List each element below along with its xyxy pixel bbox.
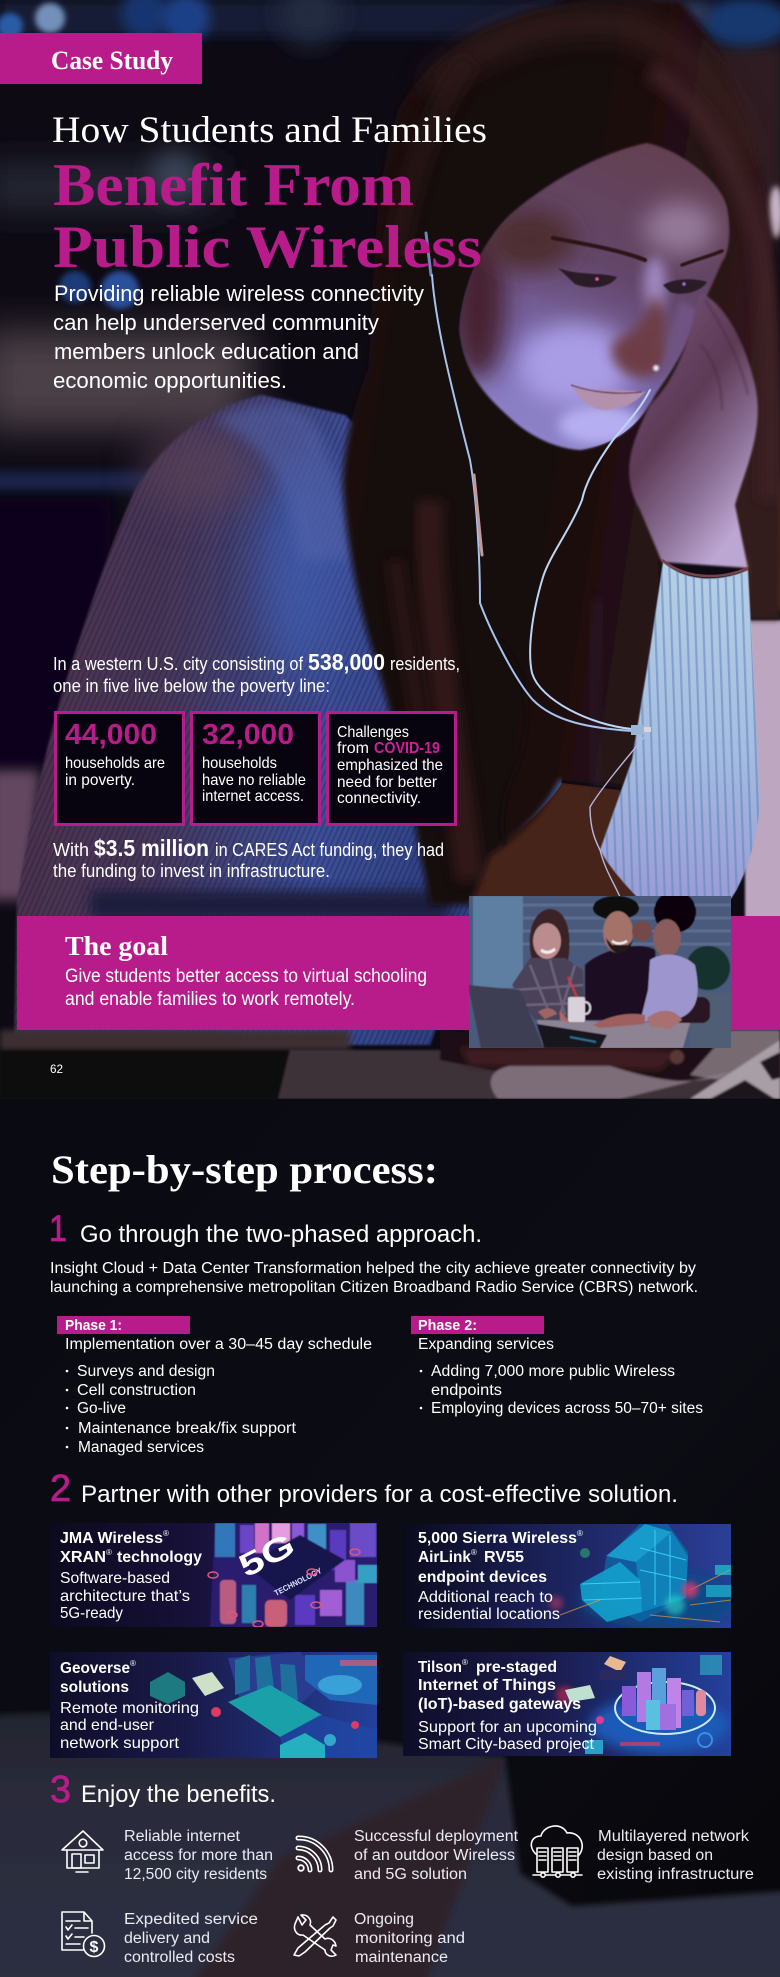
photo: earphone wires (426, 233, 651, 897)
panel: JMA Wireless (50, 1523, 377, 1627)
panel: JMA Wireless: architecture that’s (60, 1588, 190, 1605)
heading: step-by-step process: Step-by-step process: (51, 1147, 438, 1192)
panel: Sierra Wireless: ® (577, 1529, 583, 1538)
stat box: COVID-19 challenges (328, 712, 456, 824)
stat box: 32,000: have no reliable (202, 772, 306, 789)
intro text: economic opportunities. (53, 368, 287, 393)
panel: Tilson: Smart City-based project (418, 1736, 595, 1753)
step 2 heading (50, 1468, 678, 1510)
panel: Geoverse: network support (60, 1735, 180, 1752)
city statistics text: residents, (390, 654, 460, 674)
phase 2: Adding 7,000 more public Wireless (431, 1363, 675, 1380)
stat box: COVID-19 challenges: from (337, 740, 369, 757)
photo: turtleneck (500, 776, 562, 844)
funding text: $3.5 million (94, 835, 209, 861)
illustration: 5G city: 5G (233, 1527, 301, 1585)
panel: Geoverse: and end-user (60, 1717, 155, 1734)
icon: document with dollar (62, 1912, 104, 1956)
panel: JMA Wireless: ® (163, 1529, 169, 1538)
benefit: expedited delivery and costs: delivery and (124, 1930, 210, 1947)
benefit: expedited delivery and costs: Expedited service (124, 1911, 258, 1928)
panel: Sierra Wireless (403, 1524, 740, 1628)
photo: family at laptop (468, 891, 731, 1048)
page number: 62 (50, 1064, 63, 1076)
panel: JMA Wireless: XRAN (60, 1549, 106, 1566)
stat box: COVID-19 challenges: connectivity. (337, 790, 421, 807)
hero photo: woman at laptop (0, 0, 780, 1099)
panel: JMA Wireless: technology (117, 1549, 202, 1566)
photo: brown chest shadow (430, 783, 640, 900)
benefit: multilayered network design (531, 1826, 754, 1883)
phase 1: Surveys and design (77, 1363, 215, 1380)
panel: JMA Wireless: Software-based (60, 1570, 170, 1587)
phase 2: Phase 2: (418, 1318, 477, 1334)
photo: sleeve (600, 560, 760, 900)
title (52, 110, 487, 280)
icon: house (62, 1831, 103, 1872)
photo: area under goal bar (0, 1030, 780, 1099)
panel: Sierra Wireless: RV55 (484, 1549, 524, 1566)
city statistics text (53, 649, 460, 696)
benefit: expedited delivery and costs (62, 1911, 258, 1966)
illustration: digital house (549, 1524, 740, 1628)
photo: right backdrop (745, 480, 780, 920)
step 1 description (50, 1260, 698, 1296)
panel: Sierra Wireless: 5,000 Sierra Wireless (418, 1530, 577, 1547)
benefit: ongoing monitoring: Ongoing (354, 1911, 414, 1928)
photo: face (450, 143, 729, 450)
intro text: members unlock education and (54, 339, 359, 364)
background: lower section (0, 1709, 780, 1977)
funding text: in CARES Act funding, they had (215, 840, 444, 860)
icon: wifi signal (298, 1838, 331, 1871)
panel: Tilson: Tilson (418, 1659, 462, 1676)
benefit: ongoing monitoring: monitoring and (355, 1930, 465, 1947)
photo: brows and eyes (553, 238, 722, 294)
benefit: multilayered network design: existing infrastructure (597, 1866, 754, 1883)
panel: the goal: and enable families to work remotely. (65, 989, 355, 1010)
icon: cloud servers (531, 1826, 582, 1877)
panel: Tilson: Internet of Things (418, 1677, 556, 1694)
panel: Tilson: (IoT)-based gateways (418, 1696, 581, 1713)
panel: Geoverse (50, 1652, 377, 1758)
step 2 heading: 2 (50, 1468, 71, 1510)
benefit: multilayered network design: Multilayered network (598, 1828, 749, 1845)
tag: case study (0, 33, 202, 84)
photo: finger lines (700, 300, 748, 410)
photo: hair (343, 0, 780, 905)
panel: JMA Wireless: 5G-ready (60, 1605, 123, 1622)
step 3 heading: Enjoy the benefits. (81, 1781, 276, 1808)
benefit: outdoor wireless and 5G: and 5G solution (354, 1866, 467, 1883)
phase 1: Go-live (77, 1400, 126, 1417)
icon: wrench and screwdriver (294, 1915, 336, 1956)
stat box: 44,000: households are (65, 755, 165, 772)
panel: Sierra Wireless: residential locations (418, 1606, 560, 1623)
benefit: reliable internet access: Reliable internet (124, 1828, 241, 1845)
stat box: COVID-19 challenges: COVID-19 (374, 740, 440, 757)
phase 1: Maintenance break/fix support (78, 1420, 297, 1437)
panel: Geoverse: ® (130, 1659, 136, 1668)
stat box: 32,000 (192, 712, 320, 824)
panel: the goal (17, 916, 780, 1030)
stat box: 32,000: internet access. (202, 788, 304, 805)
benefit: outdoor wireless and 5G: of an outdoor Wireless (354, 1847, 515, 1864)
benefit: ongoing monitoring (294, 1911, 465, 1966)
step 1 heading (49, 1208, 482, 1249)
stat box: COVID-19 challenges: need for better (337, 774, 438, 791)
illustration: smart city (556, 1655, 730, 1754)
benefit: outdoor wireless and 5G: Successful deployment (354, 1828, 519, 1845)
panel: Tilson: pre-staged (476, 1659, 557, 1676)
panel: Sierra Wireless: AirLink (418, 1549, 471, 1566)
photo: hand (629, 293, 758, 568)
title: Benefit From (53, 152, 414, 218)
funding text: the funding to invest in infrastructure. (53, 861, 330, 881)
benefit: outdoor wireless and 5G (298, 1828, 519, 1883)
intro text: Providing reliable wireless connectivity (54, 281, 424, 306)
panel: JMA Wireless: ® (106, 1548, 112, 1557)
phase 2: endpoints (431, 1382, 502, 1399)
benefit: reliable internet access: 12,500 city residents (124, 1866, 267, 1883)
stat box: 44,000 (56, 712, 184, 824)
stat box: 32,000: 32,000 (202, 719, 294, 751)
benefit: reliable internet access (62, 1828, 273, 1883)
stat box: COVID-19 challenges: Challenges (337, 724, 409, 741)
title: Public Wireless (53, 214, 482, 280)
step 3 heading: 3 (50, 1769, 71, 1811)
city statistics text: 538,000 (308, 649, 385, 675)
illustration: network laptop (150, 1652, 377, 1758)
panel: Geoverse: Geoverse (60, 1660, 130, 1677)
panel: Geoverse: solutions (60, 1679, 129, 1696)
panel: JMA Wireless: JMA Wireless (60, 1530, 163, 1547)
funding text: With (53, 840, 89, 860)
panel: Sierra Wireless: endpoint devices (418, 1569, 547, 1586)
city statistics text: one in five live below the poverty line: (53, 676, 330, 696)
panel: the goal: Give students better access to virtual schooling (65, 966, 427, 987)
step 1 description: Insight Cloud + Data Center Transformation helped the city achieve greater connectivity by (50, 1260, 696, 1277)
panel: Sierra Wireless: Additional reach to (418, 1589, 553, 1606)
step 2 heading: Partner with other providers for a cost-effective solution. (81, 1481, 678, 1508)
title: How Students and Families (52, 110, 487, 151)
stat box: 32,000: households (202, 755, 277, 772)
benefit: reliable internet access: access for more than (124, 1847, 273, 1864)
stat box: COVID-19 challenges: emphasized the (337, 757, 443, 774)
photo: blurred room background (0, 0, 780, 900)
funding text (53, 835, 444, 881)
intro text: can help underserved community (53, 310, 379, 335)
step 1 heading: Go through the two-phased approach. (80, 1221, 482, 1248)
panel: Geoverse: Remote monitoring (60, 1700, 199, 1717)
tag: case study: Case Study (51, 46, 173, 75)
phase 2: Employing devices across 50–70+ sites (431, 1400, 703, 1417)
panel: Tilson (403, 1652, 731, 1756)
panel: Sierra Wireless: ® (471, 1548, 477, 1557)
benefit: expedited delivery and costs: controlled costs (124, 1949, 235, 1966)
stat box: 44,000: 44,000 (65, 719, 157, 751)
icon: document with dollar: $ (90, 1939, 99, 1956)
city statistics text: In a western U.S. city consisting of (53, 654, 304, 674)
phase 1: Implementation over a 30–45 day schedule (65, 1336, 372, 1353)
stat box: 44,000: in poverty. (65, 772, 135, 789)
phase 1: Managed services (78, 1439, 204, 1456)
photo: sweater (14, 395, 490, 1045)
illustration: 5G city: TECHNOLOGY (273, 1566, 324, 1598)
panel: the goal: The goal (65, 931, 169, 961)
phase 1: Phase 1: (65, 1318, 122, 1334)
panel: Tilson: ® (462, 1658, 468, 1667)
benefit: ongoing monitoring: maintenance (355, 1949, 448, 1966)
phase 2 (411, 1316, 703, 1417)
step 1 description: launching a comprehensive metropolitan Citizen Broadband Radio Service (CBRS) network. (50, 1279, 698, 1296)
panel: Tilson: Support for an upcoming (418, 1719, 597, 1736)
intro text (53, 281, 424, 393)
step 1 heading: 1 (49, 1208, 67, 1249)
phase 1 (57, 1316, 372, 1456)
phase 1: Cell construction (77, 1382, 196, 1399)
benefit: multilayered network design: design based on (597, 1847, 713, 1864)
illustration: 5G city (208, 1523, 377, 1627)
step 3 heading (50, 1769, 276, 1811)
photo: lips (571, 385, 645, 410)
phase 2: Expanding services (418, 1336, 554, 1353)
